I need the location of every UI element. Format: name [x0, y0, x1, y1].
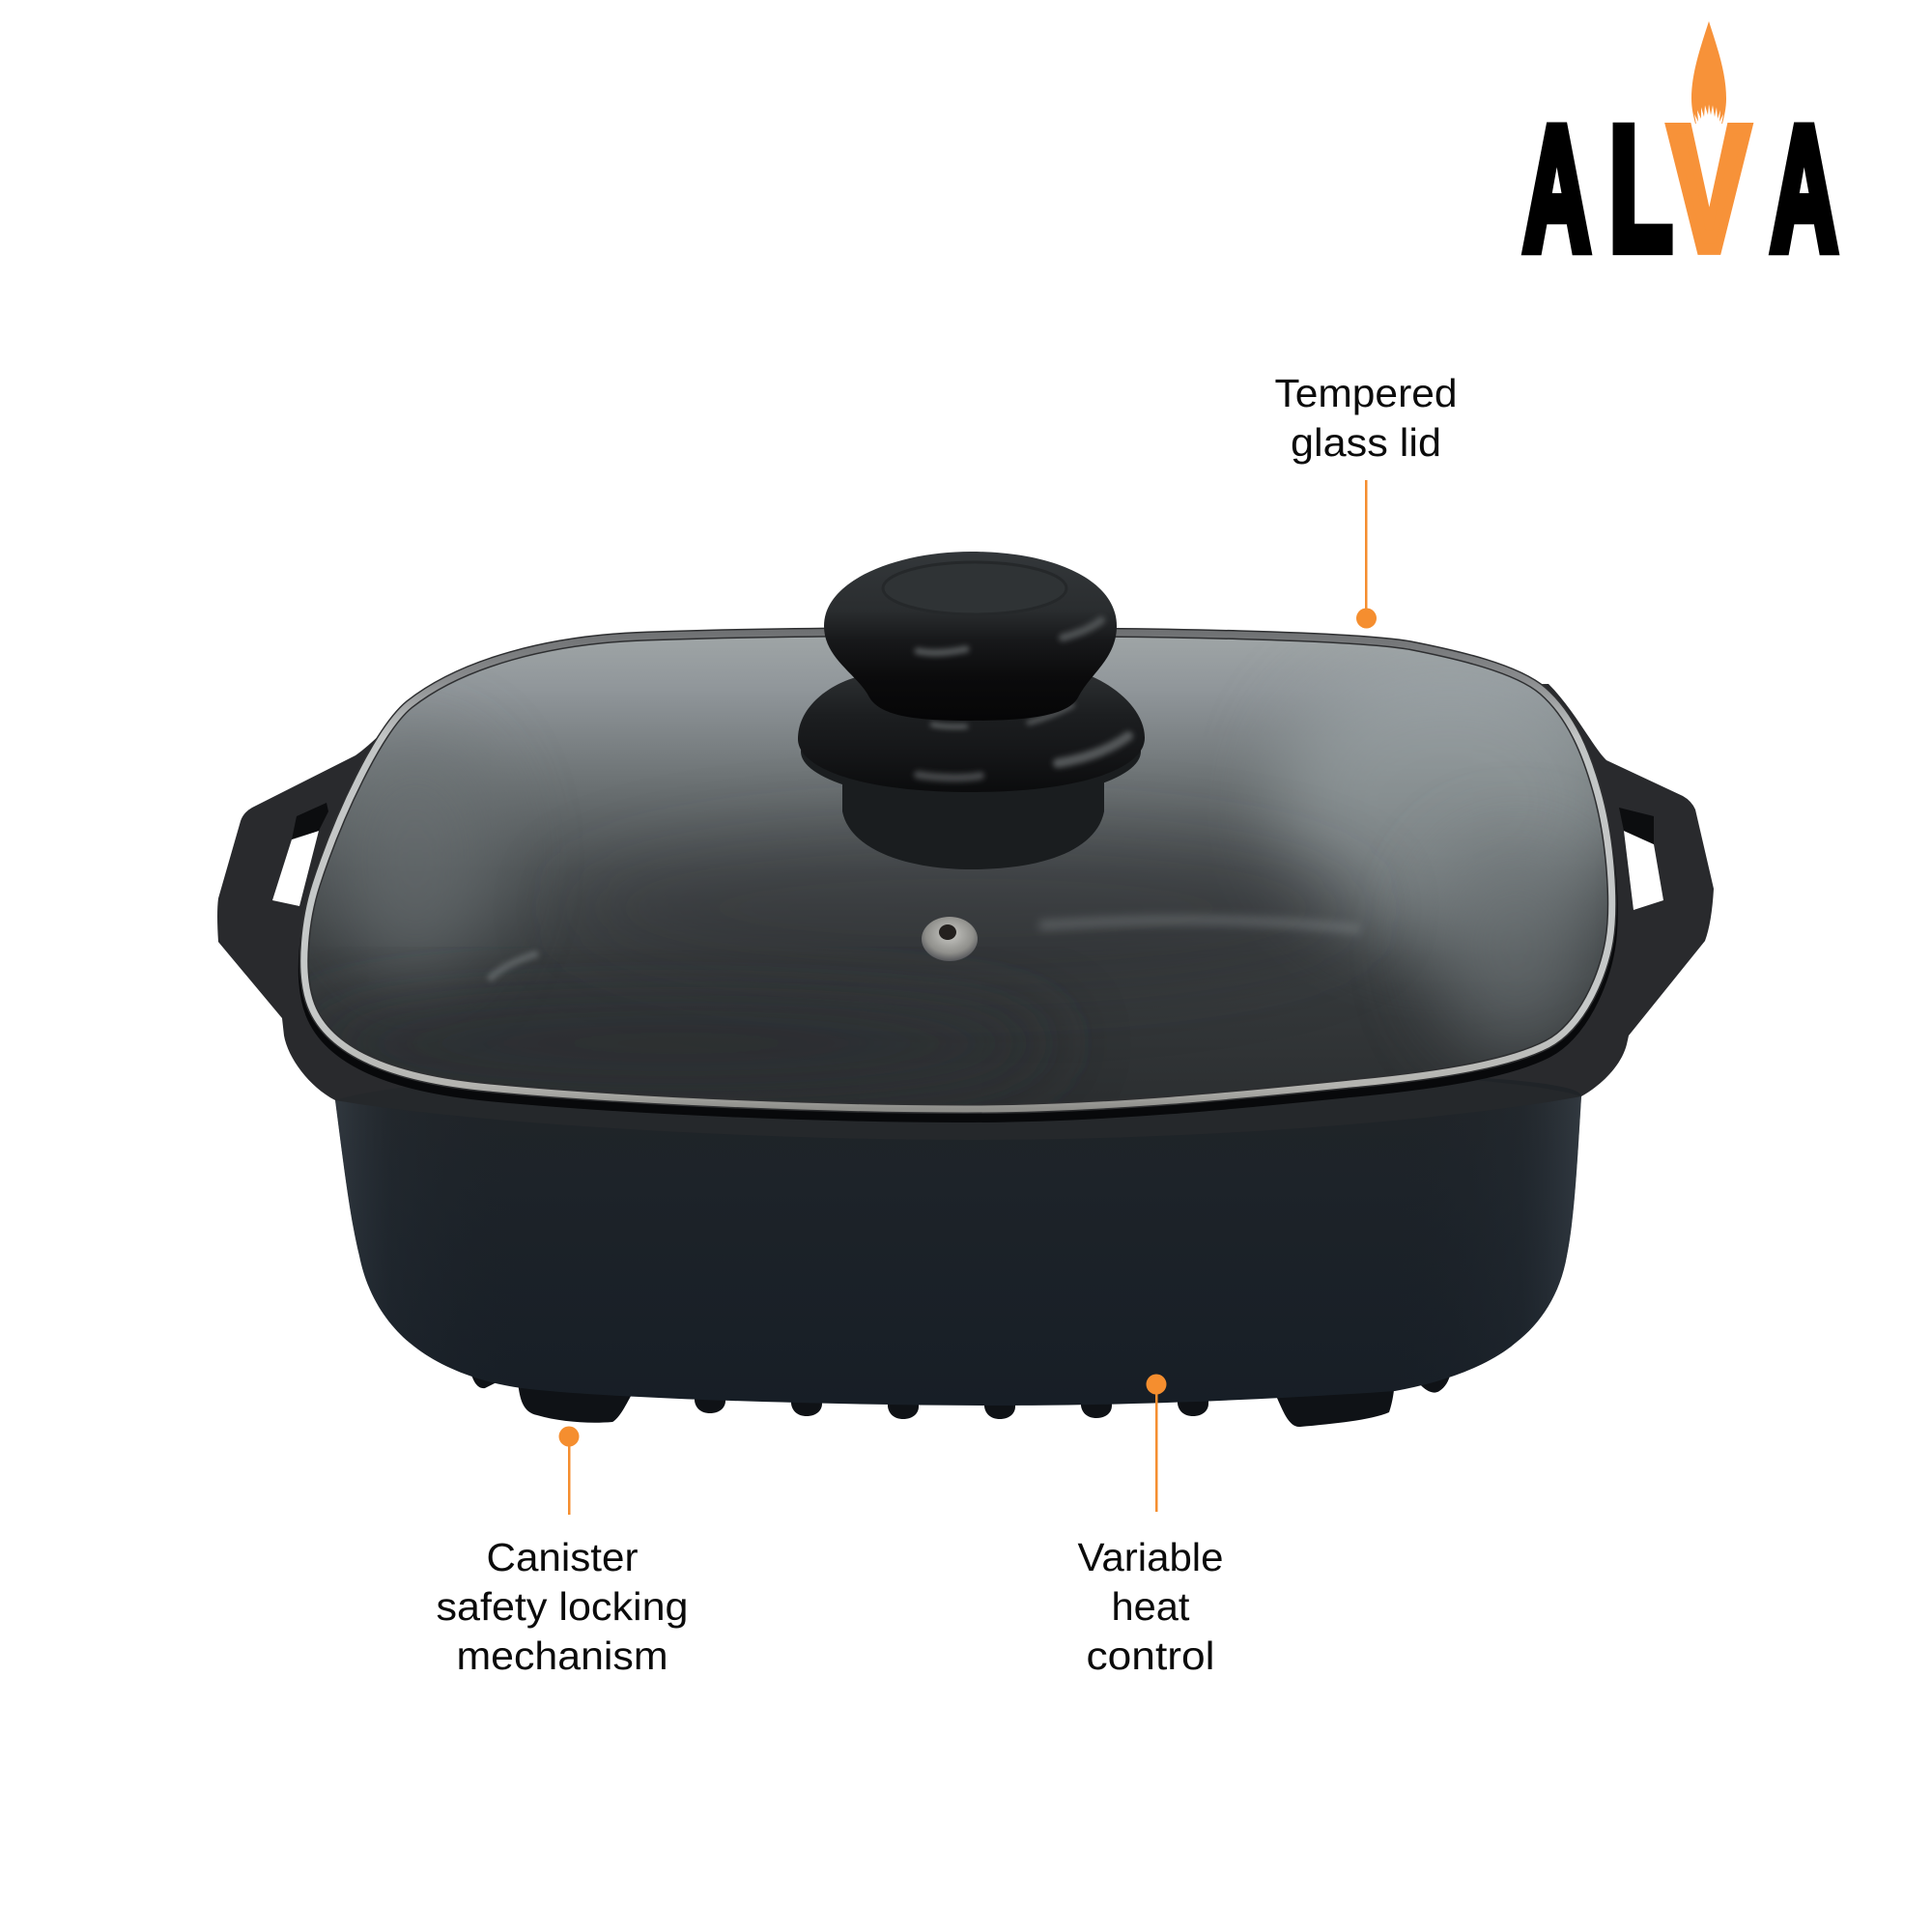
pot body: [335, 1071, 1581, 1406]
leader line: [568, 1439, 570, 1515]
knob top highlights: [918, 620, 1101, 653]
label text: Tempered: [1275, 371, 1457, 415]
wordmark letter V: V: [1669, 90, 1749, 287]
product: cooker pot with glass lid: [217, 552, 1714, 1427]
marker dot: [1146, 1374, 1167, 1395]
callout: tempered glass lid: [1275, 371, 1457, 628]
wordmark letter L: L: [1609, 90, 1672, 287]
label text: glass lid: [1291, 420, 1441, 465]
label text: mechanism: [456, 1634, 668, 1678]
knob base highlights: [918, 705, 1128, 778]
knob shadow and reflection: [801, 750, 1141, 869]
knob top: [824, 552, 1117, 721]
glass highlight streaks: [1039, 920, 1360, 929]
leader line: [1155, 1387, 1157, 1512]
callout: canister safety locking mechanism: [437, 1426, 688, 1678]
rim band: [335, 1065, 1581, 1140]
feet under the pot: [470, 1372, 1451, 1427]
label text: heat: [1111, 1584, 1190, 1629]
black lip under the lid: [304, 639, 1612, 1117]
label text: Canister: [487, 1535, 638, 1579]
knob: [798, 552, 1145, 792]
leader line: [1365, 480, 1368, 620]
body edge sheen: [335, 1096, 1581, 1361]
label text: control: [1086, 1634, 1215, 1678]
wordmark letter A (second): A: [1771, 90, 1837, 287]
label text: [1078, 1535, 1223, 1678]
logo: Alva wordmark with flame: [1523, 21, 1837, 287]
label text: [437, 1535, 688, 1678]
glass lid: [309, 638, 1607, 1104]
knob face: [883, 562, 1066, 614]
label text: [1275, 371, 1457, 465]
steel lid ring: [304, 632, 1612, 1109]
knob base: [798, 674, 1145, 792]
marker dot: [1356, 609, 1377, 628]
marker dot: [558, 1426, 580, 1447]
callout: variable heat control: [1078, 1374, 1223, 1678]
icon: flame: [1691, 21, 1726, 125]
wordmark letter A: A: [1523, 90, 1590, 287]
steam vent: [922, 917, 978, 961]
pot silhouette with rim and handles: [217, 684, 1714, 1100]
label text: safety locking: [437, 1584, 688, 1629]
label text: Variable: [1078, 1535, 1223, 1579]
handle hole shadows: [292, 803, 1654, 844]
